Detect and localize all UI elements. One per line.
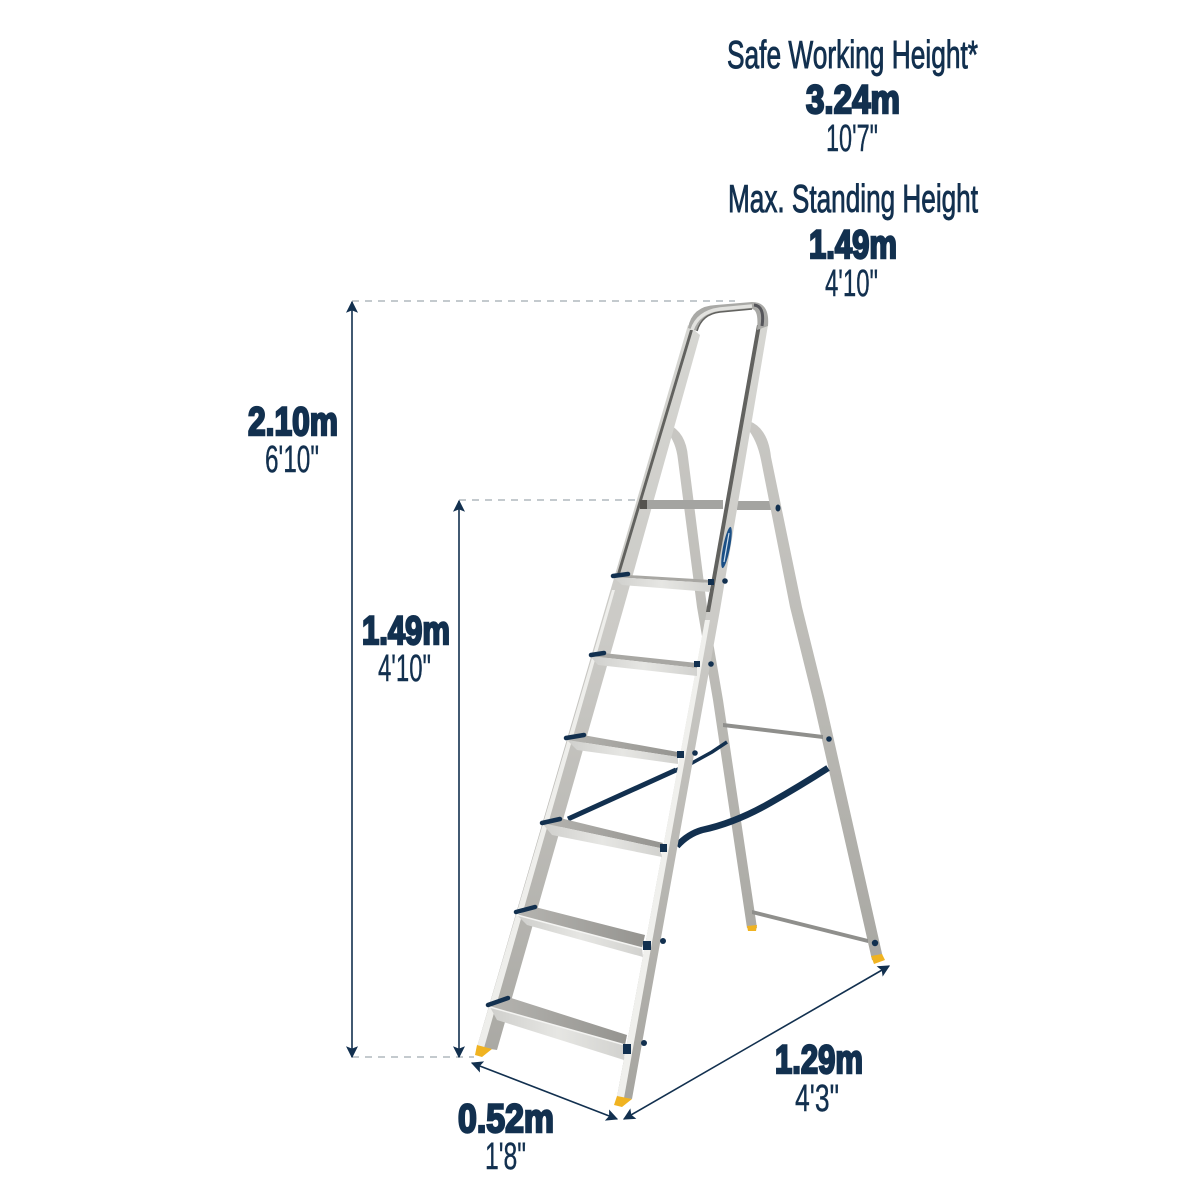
right rear leg	[747, 421, 883, 960]
safe working height block	[727, 34, 978, 160]
platform bar	[640, 500, 723, 509]
front left stile	[477, 325, 700, 1050]
top handle	[688, 302, 768, 331]
value: 4 feet 10: 4'10"	[825, 263, 878, 305]
heading: max standing height: Max. Standing Height	[728, 178, 978, 221]
lower strap	[677, 768, 828, 846]
value: 10 feet 7: 10'7"	[826, 118, 878, 160]
label: 0.52m: 0.52m	[458, 1097, 554, 1141]
left rear leg	[667, 424, 757, 928]
rear feet	[747, 925, 757, 931]
front right foot	[614, 1096, 632, 1107]
max standing height block	[728, 178, 978, 305]
dimension: width 0.52m	[458, 1063, 617, 1178]
value: 1.49m: 1.49m	[809, 223, 897, 267]
arrow: width	[472, 1063, 617, 1119]
rear rivets	[826, 736, 832, 742]
right platform bar	[737, 501, 772, 510]
label: 4 feet 10: 4'10"	[378, 648, 431, 690]
arrow: overall height	[351, 302, 353, 1057]
restraining straps	[568, 742, 828, 846]
heading: safe working height: Safe Working Height*	[727, 34, 978, 77]
dimension: overall height 2.10m	[248, 301, 735, 1057]
brand label	[719, 526, 734, 569]
tread 1	[613, 574, 728, 592]
tread 3	[566, 735, 698, 764]
arrow: standing height	[458, 501, 460, 1057]
front left foot	[475, 1045, 492, 1057]
label: 1.29m: 1.29m	[775, 1038, 863, 1082]
tread 5	[516, 907, 666, 957]
step ladder illustration	[475, 302, 885, 1107]
label: 4 feet 3: 4'3"	[795, 1078, 839, 1120]
dimension: standing height 1.49m	[362, 500, 642, 1057]
arrow: depth	[624, 966, 889, 1119]
dimension: depth 1.29m	[624, 966, 889, 1120]
label: 1.49m: 1.49m	[362, 609, 450, 653]
tread 4	[542, 818, 667, 857]
lower cross bar	[752, 910, 868, 943]
tread 2	[590, 653, 714, 676]
label: 2.10m: 2.10m	[248, 400, 338, 444]
upper strap	[568, 770, 676, 819]
label: 1 foot 8: 1'8"	[485, 1136, 526, 1178]
value: 3.24m: 3.24m	[806, 78, 900, 122]
tread 6	[488, 997, 647, 1060]
rear frame	[667, 421, 885, 964]
upper cross bar	[723, 723, 823, 739]
label: 6 feet 10: 6'10"	[265, 439, 319, 481]
front right stile	[617, 325, 768, 1099]
